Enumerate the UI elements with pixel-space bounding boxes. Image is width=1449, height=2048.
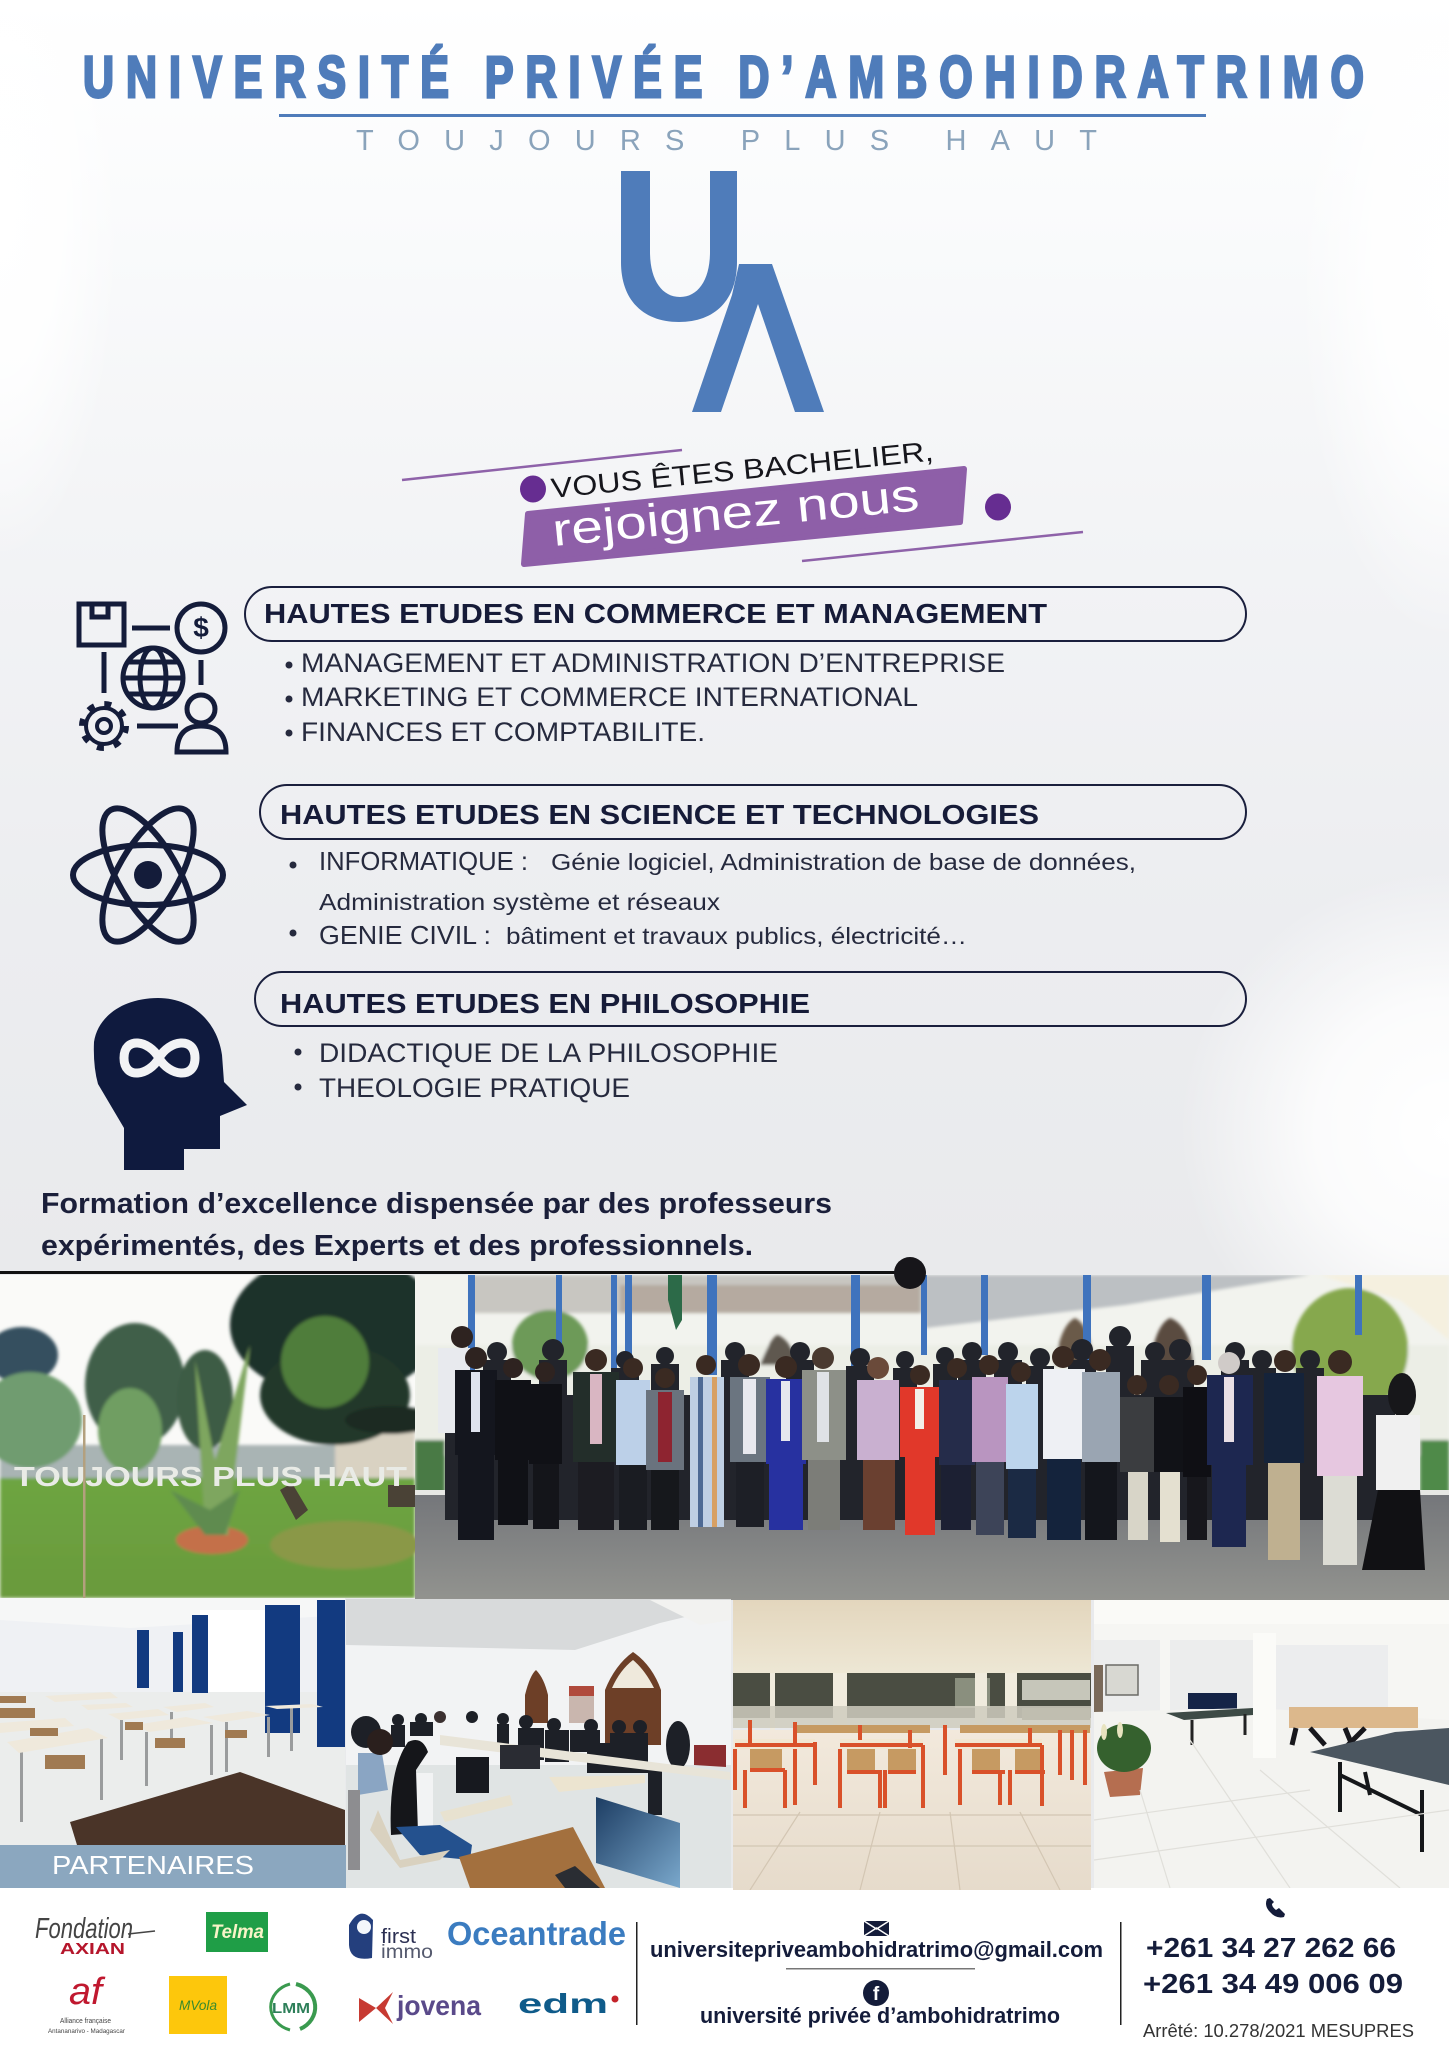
contact: email: universitepriveambohidratrimo@gmail.com [650,1937,1103,1962]
logo: Alliance francaise: Alliance française [60,2018,111,2025]
plant [1097,1722,1151,1797]
partner logos [35,1912,626,2035]
divider [636,1922,638,2025]
logo: EDM [518,1988,618,2019]
list: commerce: FINANCES ET COMPTABILITE. [301,717,705,747]
icon: facebook: f [873,1984,880,2005]
far row [351,1711,690,1815]
logo: LMM: LMM [272,2000,310,2017]
student [370,1740,513,1868]
icon: business network [79,604,226,752]
logo: Alliance francaise: af [69,1971,106,2013]
ground [415,1493,1449,1600]
title: UNIVERSITÉ PRIVÉE D’AMBOHIDRATRIMO [83,45,1364,110]
photo: game room [1094,1600,1449,1888]
balcony [415,1275,1449,1490]
divider [1120,1922,1122,2025]
photo: cafeteria [733,1600,1091,1890]
panel: science: HAUTES ETUDES EN SCIENCE ET TECHNOLOGIES [280,799,1039,830]
statement text: Formation d’excellence dispensée par des professeurs [41,1188,832,1220]
logo: Telma [206,1912,268,1952]
panel: philosophie [94,972,1246,1170]
tagline: TOUJOURS PLUS HAUT [356,125,1097,157]
pill heading: philosophie [255,972,1246,1026]
banner: partenaires [0,1845,346,1888]
photo: group [415,1275,1449,1600]
front desk and monitor [459,1827,605,1888]
contact: phone [1143,1898,1403,1999]
list: science: INFORMATIQUE : [319,846,528,876]
call to action badge: VOUS ÊTES BACHELIER, [550,436,935,504]
icon: facebook [863,1980,889,2006]
photo: campus garden [0,1275,415,1598]
icon: head with infinity [94,998,247,1170]
photo: classroom [0,1598,345,1845]
sign text: TOUJOURS PLUS HAUT [14,1461,407,1492]
call to action badge [402,436,1083,564]
logo: LMM [271,1984,315,2030]
far table [1166,1708,1253,1720]
flag [668,1275,682,1330]
icon: atom [73,795,223,955]
photo: computer room [346,1599,731,1888]
panel: philosophie: HAUTES ETUDES EN PHILOSOPHIE [280,988,810,1019]
list: philosophie [294,1038,778,1103]
foosball [1289,1707,1418,1728]
statement text: expérimentés, des Experts et des professionnels. [41,1230,753,1262]
list: philosophie: THEOLOGIE PRATIQUE [319,1073,630,1103]
panel: science [73,785,1246,955]
logo: Fondation Axian: Fondation [35,1913,133,1945]
front row people [455,1346,1425,1570]
list: commerce [286,648,1005,747]
logo: Oceantrade: Oceantrade [447,1915,626,1952]
list: science: Génie logiciel, Administration de base de données, [551,849,1136,875]
logo UA [621,171,824,412]
pill heading: commerce [245,587,1246,641]
logo: Alliance francaise: Antananarivo - Madagascar [48,2029,125,2035]
logo: Telma: Telma [211,1922,264,1943]
logo: first immo: immo [381,1942,433,1963]
logo: Jovena [359,1990,481,2024]
call to action badge: rejoignez nous [550,468,921,556]
separator line with dot [0,1257,926,1289]
logo: Fondation Axian: AXIAN [60,1941,125,1958]
pillars [468,1275,1362,1375]
list: science: Administration système et réseaux [319,889,721,915]
back row [438,1326,1395,1520]
panel: commerce [79,587,1246,752]
front table [70,1772,345,1845]
list: commerce: MANAGEMENT ET ADMINISTRATION D’ENTREPRISE [301,648,1005,678]
logo: MVola: MVola [179,1997,217,2013]
list: science [290,846,1136,950]
title rule [279,114,1206,117]
list: philosophie: DIDACTIQUE DE LA PHILOSOPHIE [319,1038,778,1068]
contact: email [650,1921,1103,1970]
list: science: bâtiment et travaux publics, électricité… [506,923,967,949]
banner: partenaires: PARTENAIRES [52,1850,254,1880]
statement text [41,1188,832,1262]
logo: Fondation Axian [35,1913,155,1958]
logo: first immo: first [381,1926,416,1948]
icon: phone [1266,1898,1285,1917]
panel: commerce: HAUTES ETUDES EN COMMERCE ET MANAGEMENT [264,598,1047,629]
contact: facebook [700,1980,1060,2028]
panel: commerce: $ [193,612,209,643]
ping-pong table [1310,1728,1449,1852]
list: science: GENIE CIVIL : [319,920,491,950]
contact: phone: +261 34 27 262 66 [1146,1932,1396,1963]
pill heading: science [260,785,1246,839]
logo: MVola [169,1976,227,2034]
contact: facebook: université privée d’ambohidratrimo [700,2003,1060,2028]
logo: EDM: edm [518,1988,608,2019]
logo: Jovena: jovena [396,1990,481,2021]
logo: first immo [349,1914,433,1963]
icon: envelope [864,1921,889,1936]
list: commerce: MARKETING ET COMMERCE INTERNATIONAL [301,682,918,712]
logo: Alliance francaise [48,1971,125,2035]
accreditation: Arrêté: 10.278/2021 MESUPRES [1143,2021,1414,2041]
contact: phone: +261 34 49 006 09 [1143,1968,1403,1999]
